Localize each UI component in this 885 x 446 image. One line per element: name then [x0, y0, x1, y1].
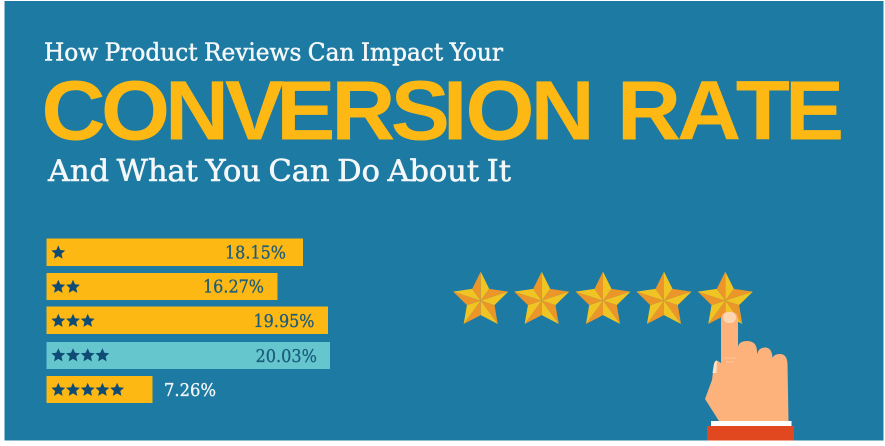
bar: five stars 7.26% [46, 376, 216, 403]
thumb nail [712, 360, 717, 373]
five gold stars [453, 272, 753, 324]
finger crease [724, 358, 736, 362]
bar: one star 18.15%: 18.15% [225, 242, 286, 264]
bar: one star 18.15% [46, 238, 303, 266]
title: intro line: How Product Reviews Can Impact Your [44, 38, 504, 66]
bar: four stars 20.03% [46, 342, 330, 369]
bar chart: ratings [46, 238, 330, 403]
bar: two stars 16.27% [46, 273, 278, 300]
fingernail [723, 312, 736, 323]
icon: pointing hand [705, 312, 794, 440]
title: closing line: And What You Can Do About It [47, 154, 511, 189]
bar: two stars 16.27%: 16.27% [203, 276, 264, 298]
bar: five stars 7.26%: 7.26% [164, 380, 216, 401]
jacket sleeve [707, 426, 794, 440]
bar: three stars 19.95%: 19.95% [254, 311, 314, 332]
title: conversion rate: CONVERSIONRATE [41, 65, 844, 158]
bar: three stars 19.95% [46, 306, 328, 334]
bar: four stars 20.03%: 20.03% [256, 346, 317, 367]
shirt cuff [711, 421, 792, 426]
